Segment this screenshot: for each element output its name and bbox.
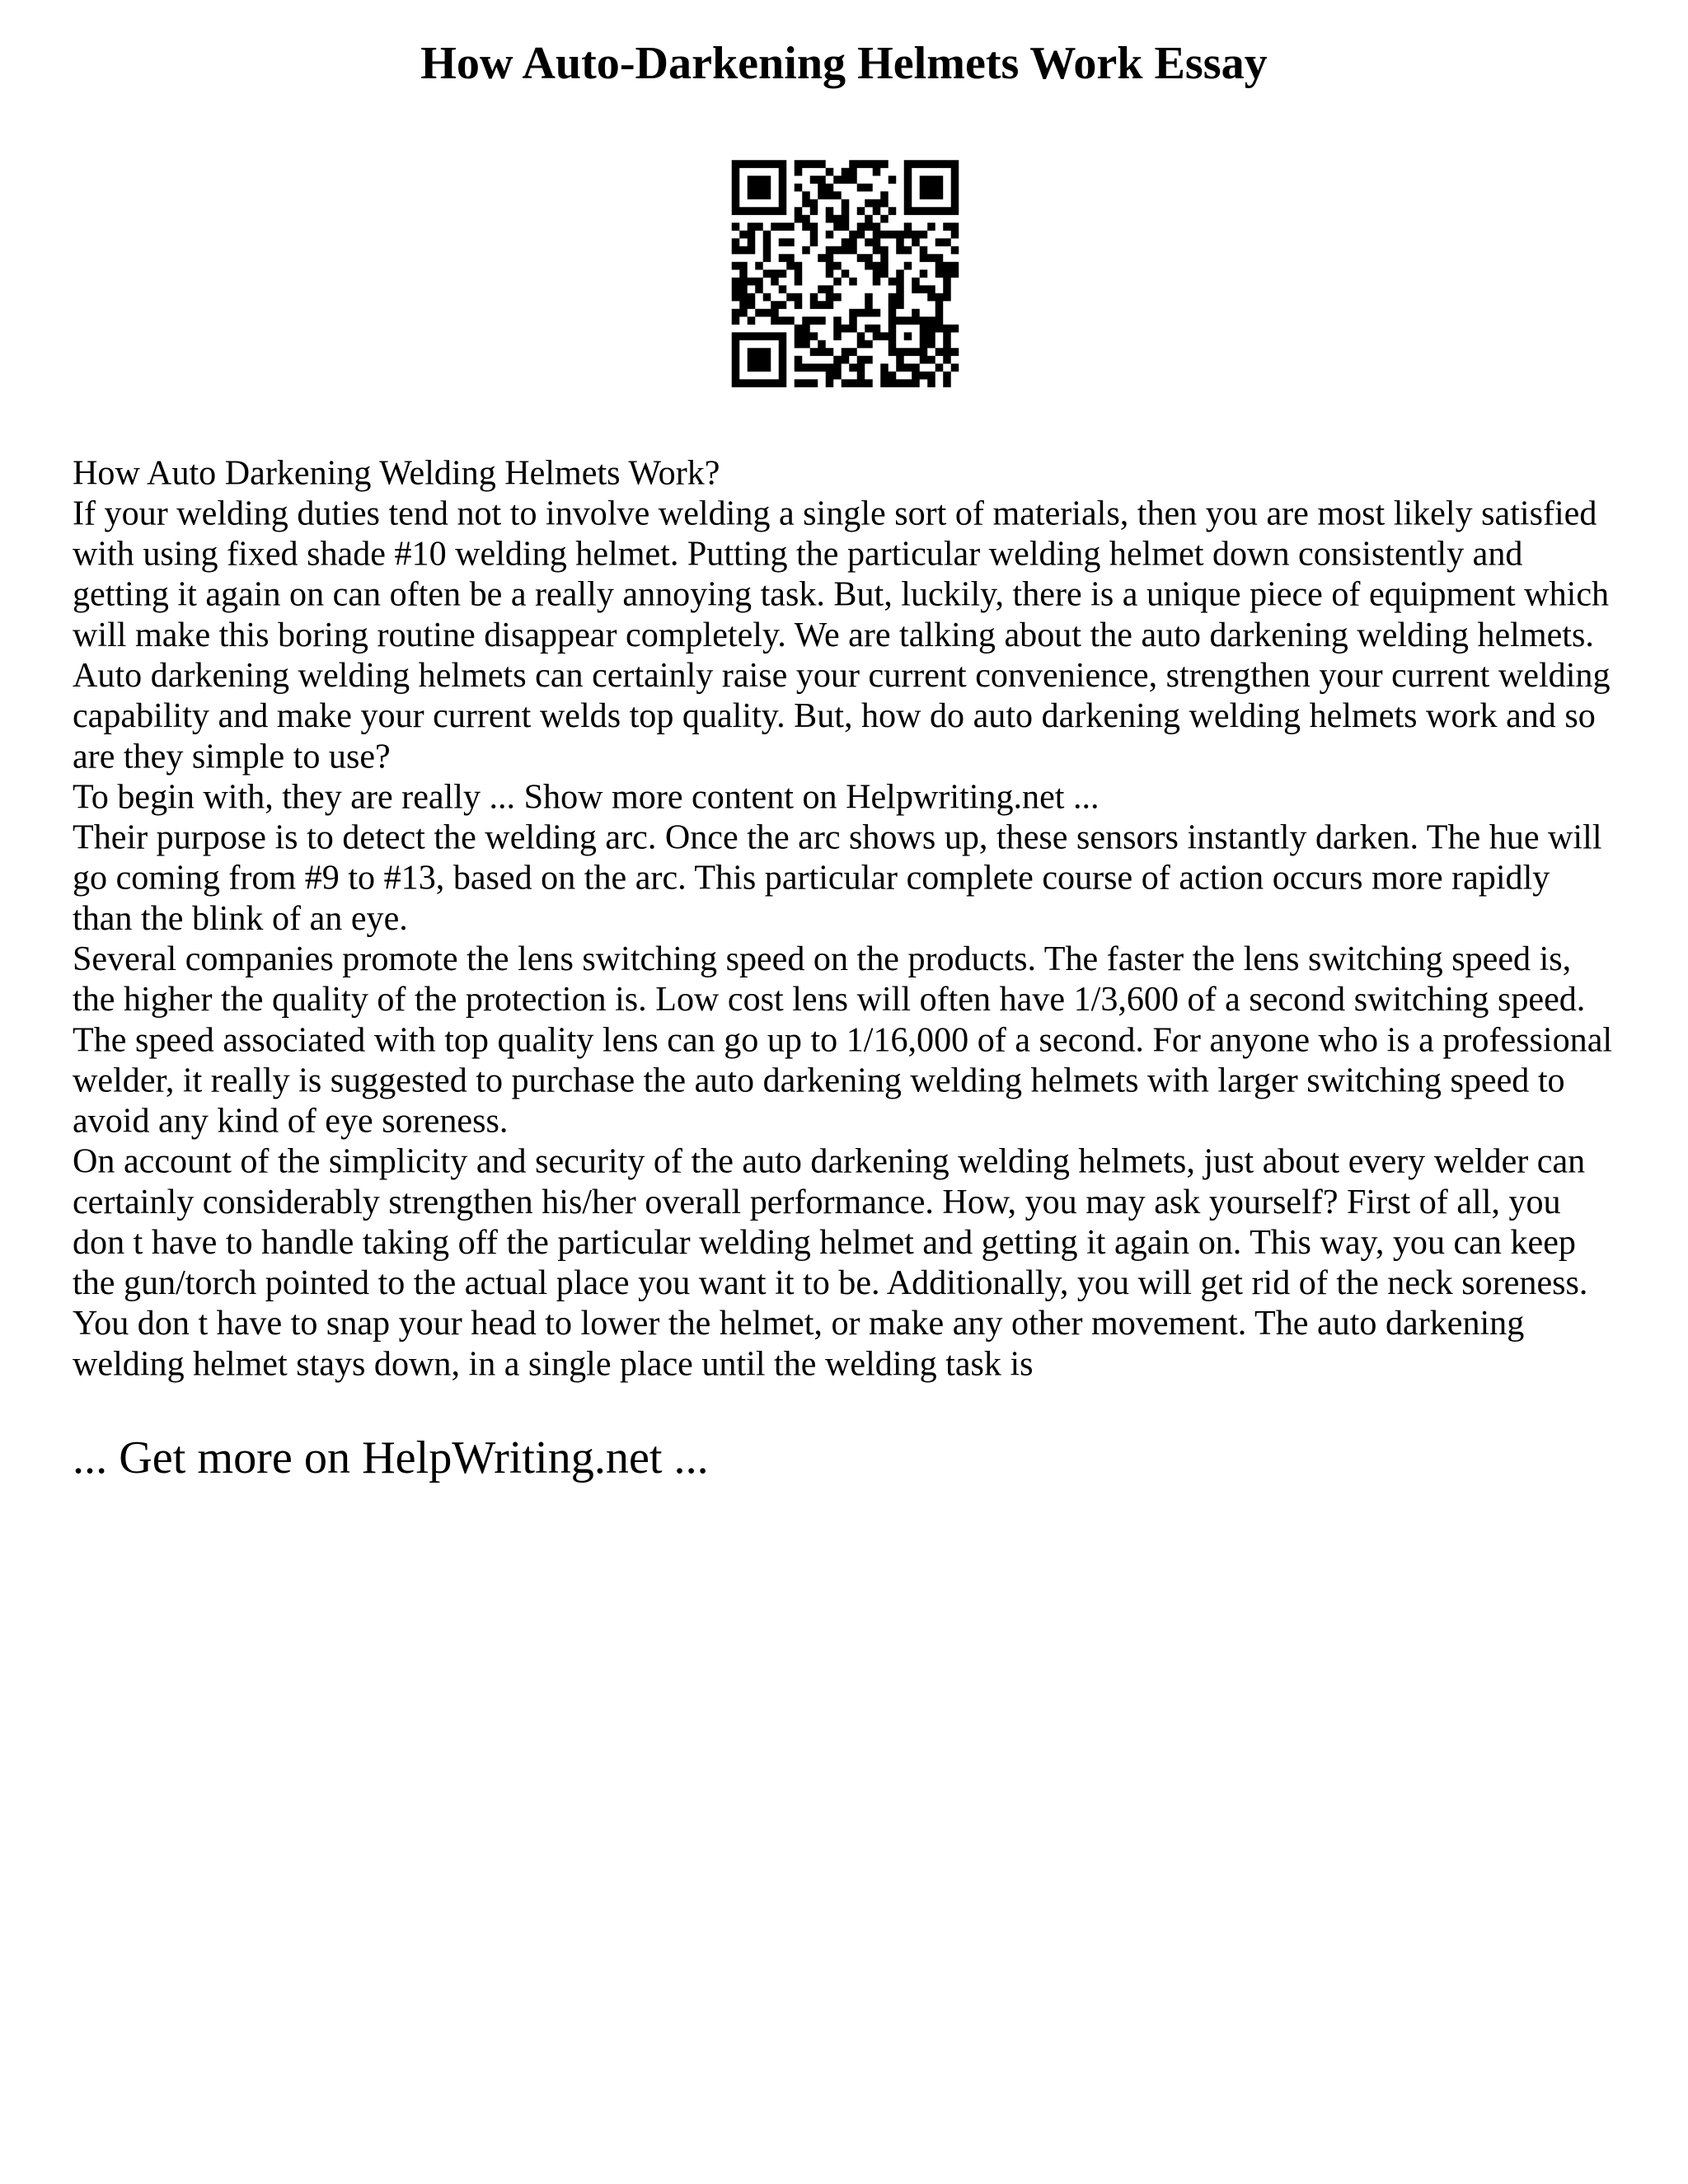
paragraph: performance: On account of the simplicity and security of the auto darkening welding helmets, just about every welder can (73, 1142, 1585, 1181)
paragraph: performance: welding helmet stays down, in a single place until the welding task is (73, 1344, 1034, 1383)
paragraph: introduction: are they simple to use? (73, 737, 391, 776)
paragraph: introduction: will make this boring routine disappear completely. We are talking about the auto darkening welding helmets. (73, 616, 1594, 654)
paragraph: introduction: If your welding duties tend not to involve welding a single sort of materials, then you are most likely satisfied (73, 494, 1597, 532)
paragraph: heading line: How Auto Darkening Welding Helmets Work? (73, 453, 720, 492)
paragraph: introduction: capability and make your current welds top quality. But, how do auto darkening welding helmets work and so (73, 696, 1596, 735)
paragraph: performance: the gun/torch pointed to the actual place you want it to be. Additionally, you will get rid of the neck soreness. (73, 1263, 1587, 1302)
paragraph: switching speed: The speed associated with top quality lens can go up to 1/16,000 of a second. For anyone who is a professional (73, 1020, 1612, 1059)
paragraph: performance (73, 1142, 1587, 1383)
title: How Auto-Darkening Helmets Work Essay (420, 38, 1268, 89)
paragraph: sensors (73, 818, 1602, 938)
paragraph: performance: certainly considerably strengthen his/her overall performance. How, you may ask yourself? First of all, you (73, 1183, 1561, 1221)
paragraph: switching speed: the higher the quality of the protection is. Low cost lens will often have 1/3,600 of a second switching speed. (73, 980, 1585, 1019)
paragraph: switching speed: avoid any kind of eye soreness. (73, 1101, 508, 1141)
call to action: ... Get more on HelpWriting.net ... (73, 1432, 709, 1483)
paragraph: introduction (73, 494, 1611, 776)
paragraph: sensors: Their purpose is to detect the welding arc. Once the arc shows up, these sensors instantly darken. The hue will (73, 818, 1602, 857)
paragraph: switching speed: Several companies promote the lens switching speed on the products. The faster the lens switching speed is, (73, 940, 1571, 978)
paragraph: switching speed: welder, it really is suggested to purchase the auto darkening welding helmets with larger switching speed to (73, 1061, 1565, 1099)
essay body text (73, 453, 1612, 1383)
paragraph: introduction: Auto darkening welding helmets can certainly raise your current convenience, strengthen your current welding (73, 656, 1611, 695)
paragraph: show more line: To begin with, they are really ... Show more content on Helpwriting.net ... (73, 777, 1100, 816)
paragraph: performance: don t have to handle taking off the particular welding helmet and getting it again on. This way, you can keep (73, 1223, 1576, 1262)
QR code (732, 160, 959, 387)
paragraph: sensors: than the blink of an eye. (73, 899, 408, 938)
paragraph: introduction: with using fixed shade #10 welding helmet. Putting the particular welding helmet down consistently and (73, 535, 1522, 574)
paragraph: performance: You don t have to snap your head to lower the helmet, or make any other movement. The auto darkening (73, 1304, 1524, 1343)
paragraph: sensors: go coming from #9 to #13, based on the arc. This particular complete course of action occurs more rapidly (73, 859, 1550, 898)
paragraph: switching speed (73, 940, 1612, 1141)
paragraph: introduction: getting it again on can often be a really annoying task. But, luckily, there is a unique piece of equipment which (73, 575, 1609, 614)
